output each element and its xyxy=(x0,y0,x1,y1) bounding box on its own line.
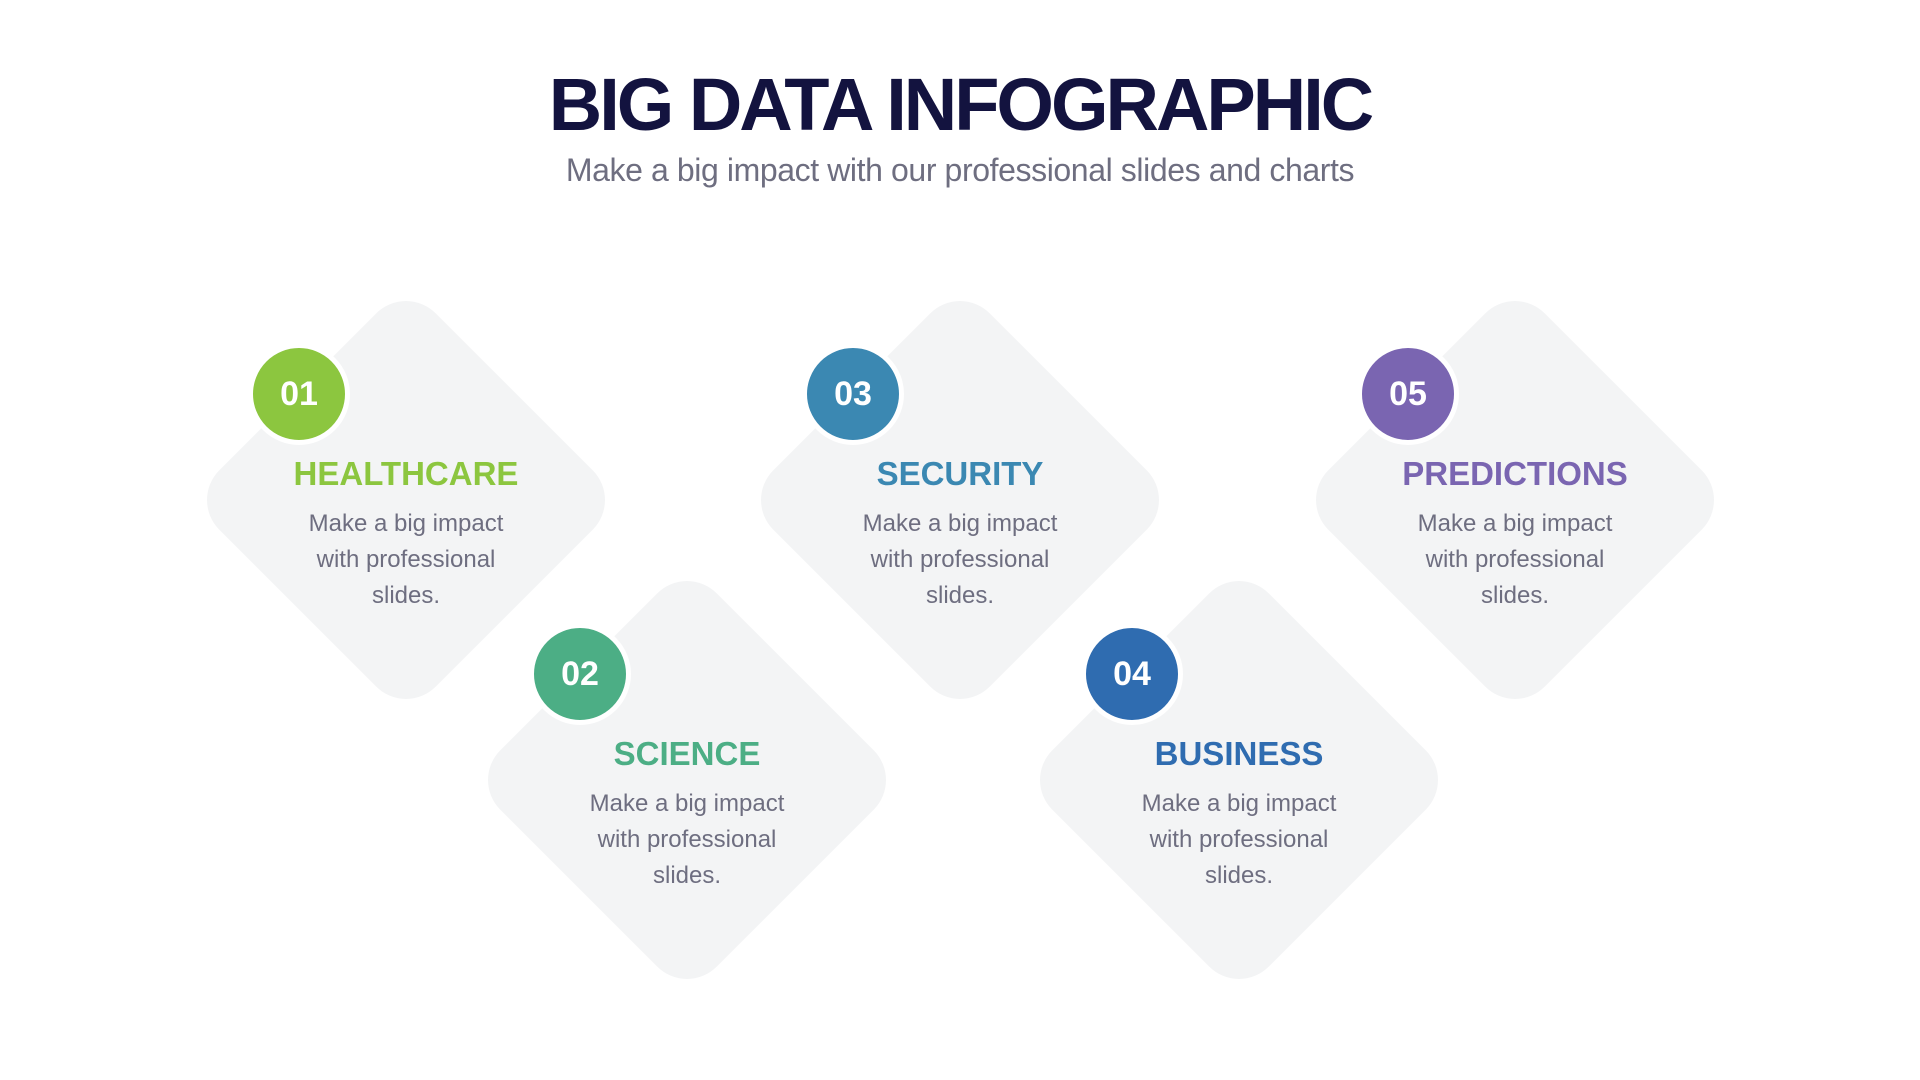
text security xyxy=(863,510,1058,609)
badge 03: 03 xyxy=(834,375,872,413)
text business: Make a big impact xyxy=(1142,790,1336,817)
text science xyxy=(590,790,784,889)
panel: business xyxy=(1040,581,1438,979)
text healthcare xyxy=(309,510,504,609)
heading security: SECURITY xyxy=(877,455,1043,492)
heading healthcare: HEALTHCARE xyxy=(294,455,518,492)
text science: Make a big impact xyxy=(590,790,784,817)
panel: predictions xyxy=(1316,301,1714,699)
text security: slides. xyxy=(926,582,994,609)
text healthcare: slides. xyxy=(372,582,440,609)
heading science: SCIENCE xyxy=(614,735,760,772)
panel: science xyxy=(488,581,886,979)
text security: Make a big impact xyxy=(863,510,1057,537)
text security: with professional xyxy=(871,546,1049,573)
badge 03 xyxy=(802,343,904,445)
badge 02 xyxy=(529,623,631,725)
text predictions: Make a big impact xyxy=(1418,510,1612,537)
badge 04: 04 xyxy=(1113,655,1151,693)
text predictions xyxy=(1418,510,1612,609)
badge 01 xyxy=(248,343,350,445)
title: BIG DATA INFOGRAPHIC xyxy=(549,63,1371,146)
text healthcare: with professional xyxy=(317,546,495,573)
panel: security xyxy=(761,301,1159,699)
text science: with professional xyxy=(598,826,776,853)
subtitle: Make a big impact with our professional slides and charts xyxy=(566,152,1354,188)
panel: healthcare xyxy=(207,301,605,699)
badge 02: 02 xyxy=(561,655,599,693)
badge 05 xyxy=(1357,343,1459,445)
text predictions: with professional xyxy=(1426,546,1604,573)
badge 04 xyxy=(1081,623,1183,725)
heading business: BUSINESS xyxy=(1155,735,1323,772)
badge 05: 05 xyxy=(1389,375,1427,413)
heading predictions: PREDICTIONS xyxy=(1402,455,1628,492)
badge 01: 01 xyxy=(280,375,318,413)
text business: slides. xyxy=(1205,862,1273,889)
text science: slides. xyxy=(653,862,721,889)
text healthcare: Make a big impact xyxy=(309,510,503,537)
text business xyxy=(1142,790,1336,889)
text business: with professional xyxy=(1150,826,1328,853)
text predictions: slides. xyxy=(1481,582,1549,609)
